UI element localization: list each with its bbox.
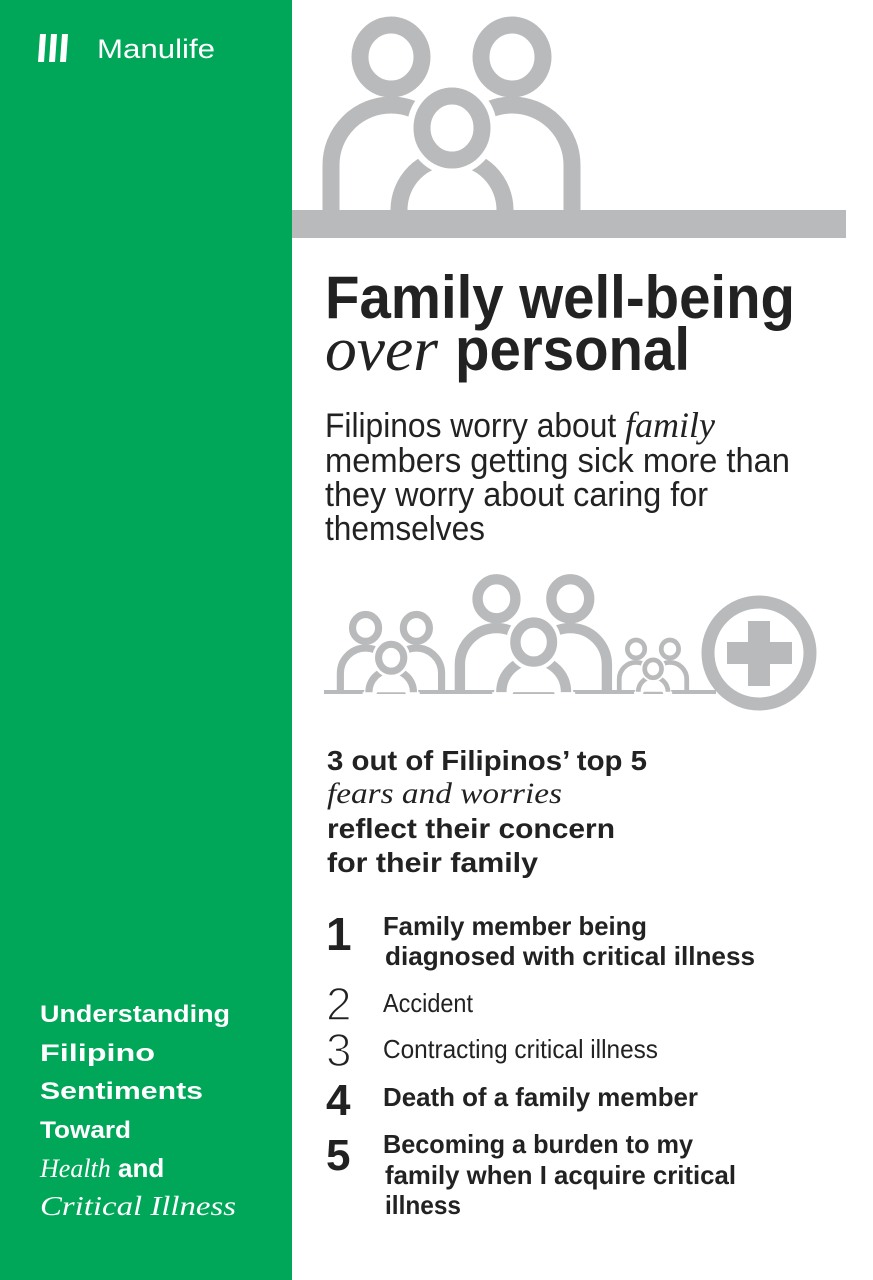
ranked list: Death of a family member [383,1082,698,1112]
ranked list: 5 [326,1131,350,1180]
ranked list: Contracting critical illness [383,1034,658,1064]
logo: Manulife: Manulife [97,34,215,64]
logo: Manulife [38,34,215,64]
ranked list: 1 [326,908,352,960]
sidebar title text: Sentiments [40,1078,203,1105]
sidebar title text: Health and [39,1153,164,1183]
title: Family well-being [325,264,795,331]
icon row: families and medical cross [324,579,810,704]
ranked list: Becoming a burden to my [383,1129,694,1159]
icon: large family [292,25,846,238]
sidebar title text: Understanding [40,1001,230,1028]
title [325,264,795,384]
fears heading: for their family [327,847,538,878]
sidebar title text: Toward [40,1117,131,1144]
ranked list: illness [385,1190,461,1220]
ranked list: 3 [326,1024,352,1076]
ranked list: family when I acquire critical [385,1160,736,1190]
ranked list: Accident [383,988,474,1018]
subtitle text: Filipinos worry about family [325,405,715,445]
ranked list: diagnosed with critical illness [385,941,755,971]
subtitle text [325,405,790,548]
ranked list [326,908,755,1220]
ranked list: 4 [326,1076,351,1125]
fears heading: 3 out of Filipinos’ top 5 [327,745,647,776]
sidebar title text: Critical Illness [40,1191,236,1221]
subtitle text: themselves [325,510,485,548]
sidebar title text: Filipino [40,1040,155,1067]
ranked list: Family member being [383,911,647,941]
sidebar title text [39,1001,236,1221]
fears heading: fears and worries [327,777,562,810]
ranked list: 2 [326,978,352,1030]
subtitle text: they worry about caring for [325,476,708,514]
panel: green sidebar [0,0,292,1280]
fears heading: reflect their concern [327,813,615,844]
subtitle text: members getting sick more than [325,442,790,480]
title: personal [455,316,690,383]
title: over [325,316,439,384]
fears heading [327,745,647,878]
